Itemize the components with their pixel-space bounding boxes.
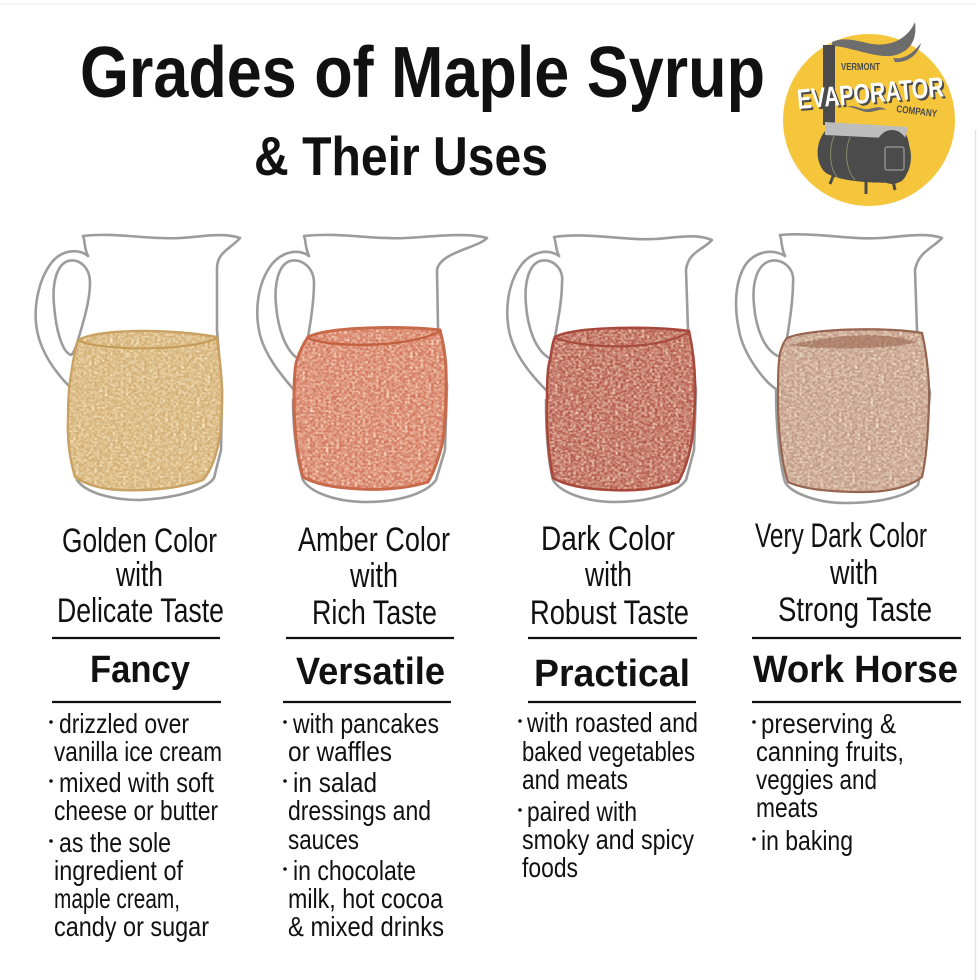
work horse uses list: in baking (761, 825, 853, 856)
amber description (298, 521, 450, 632)
title: Grades of Maple Syrup (80, 33, 765, 113)
versatile uses list: dressings and (288, 795, 431, 826)
practical uses list: paired with (527, 796, 637, 827)
work horse uses list: meats (756, 792, 818, 823)
fancy uses list: vanilla ice cream (54, 736, 222, 767)
dark description: Robust Taste (530, 594, 689, 632)
practical uses list: foods (522, 852, 578, 883)
column: Versatile (283, 521, 454, 942)
grade name: Practical: Practical (534, 653, 690, 695)
fancy uses list: as the sole (59, 827, 171, 858)
amber description: Rich Taste (312, 594, 437, 632)
dark description: Dark Color (541, 520, 675, 558)
logo: Vermont Evaporator Company (783, 22, 955, 206)
fancy uses list (49, 708, 222, 942)
versatile uses list: or waffles (288, 736, 392, 767)
grade name: Versatile: Versatile (296, 651, 445, 693)
golden description: Golden Color (62, 522, 217, 560)
amber description: with (349, 557, 398, 595)
fancy uses list: drizzled over (59, 708, 189, 739)
practical uses list: with roasted and (526, 707, 698, 738)
fancy uses list: candy or sugar (54, 911, 209, 942)
logo text: VERMONT (841, 61, 880, 73)
dark description: with (584, 556, 632, 594)
column: Fancy (49, 522, 224, 942)
versatile uses list (283, 708, 444, 942)
amber syrup (294, 328, 446, 489)
grade name: Work Horse: Work Horse (753, 649, 958, 691)
versatile uses list: milk, hot cocoa (288, 883, 443, 914)
subtitle: & Their Uses (254, 125, 548, 187)
practical uses list (518, 707, 698, 883)
very dark description: with (829, 554, 878, 592)
very dark description: Strong Taste (778, 591, 932, 629)
practical uses list: and meats (522, 764, 628, 795)
work horse uses list: canning fruits, (756, 736, 904, 767)
pitcher: golden (36, 235, 240, 500)
work horse uses list (752, 708, 904, 856)
amber description: Amber Color (298, 521, 450, 559)
very dark description (755, 517, 932, 629)
practical uses list: smoky and spicy (522, 824, 694, 855)
grade name: Fancy: Fancy (90, 649, 190, 691)
fancy uses list: cheese or butter (54, 795, 218, 826)
logo: Vermont Evaporator Company: COMPANY (896, 104, 938, 120)
pitcher: amber (257, 235, 487, 502)
golden description (57, 522, 224, 630)
versatile uses list: in chocolate (293, 855, 416, 886)
versatile uses list: with pancakes (292, 708, 439, 739)
work horse uses list: veggies and (756, 764, 877, 795)
very dark syrup (778, 329, 929, 492)
golden description: with (115, 556, 163, 594)
pitcher: dark (507, 235, 712, 502)
golden syrup (68, 331, 222, 490)
work horse uses list: preserving & (761, 708, 896, 739)
fancy uses list: mixed with soft (59, 767, 214, 798)
versatile uses list: sauces (288, 824, 359, 855)
fancy uses list: maple cream, (54, 883, 180, 914)
fancy uses list: ingredient of (54, 855, 183, 886)
versatile uses list: & mixed drinks (288, 911, 444, 942)
versatile uses list: in salad (293, 767, 377, 798)
practical uses list: baked vegetables (522, 736, 695, 767)
golden description: Delicate Taste (57, 592, 224, 630)
column: Practical (518, 520, 698, 883)
dark description (530, 520, 689, 632)
dark syrup (547, 328, 695, 490)
column: Work Horse (752, 517, 961, 856)
pitcher: very dark (736, 234, 942, 503)
